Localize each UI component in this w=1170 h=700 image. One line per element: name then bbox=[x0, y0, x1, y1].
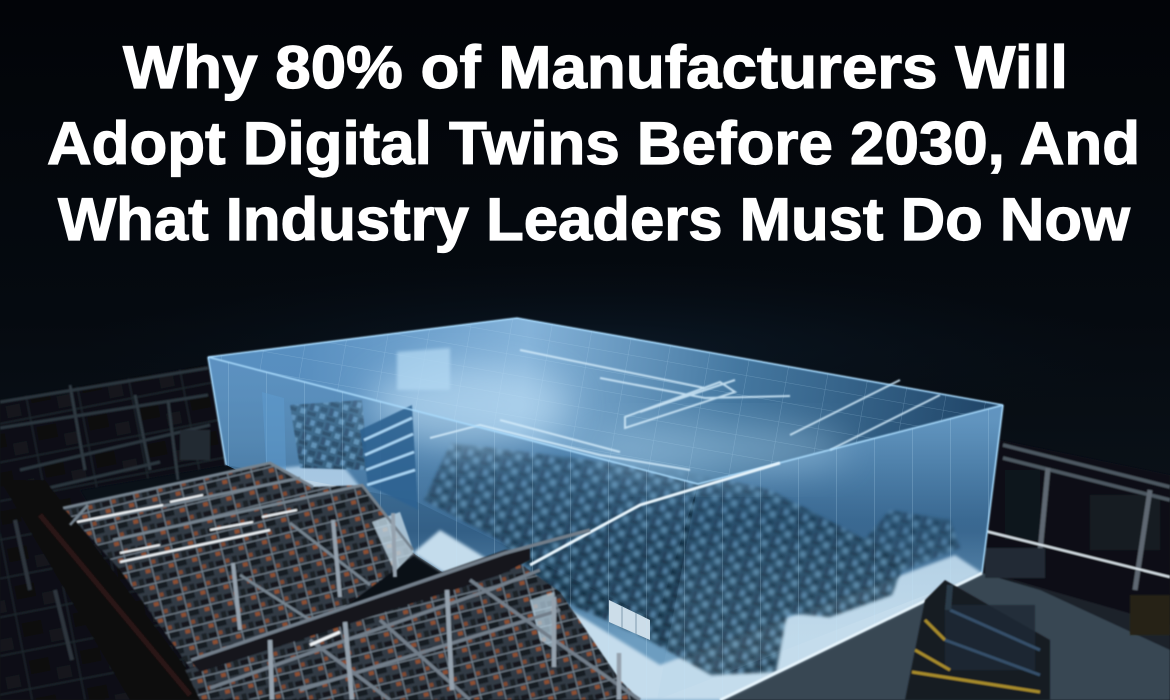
background factory hall, right bbox=[722, 440, 1170, 700]
forklift and racking, lower right bbox=[905, 580, 1170, 700]
machinery block: back left bbox=[290, 400, 368, 470]
second glow bbox=[590, 424, 850, 476]
bright crane light bbox=[530, 463, 780, 565]
wall lines bbox=[208, 357, 1003, 700]
cube floor, back left bbox=[262, 462, 395, 530]
title bbox=[47, 34, 1140, 253]
corner tower bbox=[397, 348, 450, 390]
roof grid bbox=[208, 318, 1003, 484]
control panels bbox=[360, 405, 418, 510]
title: Adopt Digital Twins Before 2030, And bbox=[47, 110, 1140, 177]
right wall veil bbox=[657, 405, 1003, 700]
roof bbox=[208, 318, 1003, 484]
white cabinets bbox=[609, 600, 650, 640]
cube floor, front bbox=[413, 530, 982, 700]
background factory hall, left bbox=[0, 365, 226, 700]
machinery block: far right bbox=[860, 510, 960, 572]
glowing digital twin cube bbox=[208, 318, 1003, 700]
small left panel bbox=[262, 392, 286, 470]
cube outline bbox=[208, 318, 1003, 573]
pipes on roof bbox=[430, 350, 940, 470]
left wall veil bbox=[208, 357, 698, 620]
foreground factory: lower frames bbox=[185, 530, 640, 700]
bright core glow bbox=[370, 365, 570, 445]
machinery block: center and right bbox=[424, 443, 905, 675]
foreground factory: upper frames bbox=[63, 463, 415, 668]
title: What Industry Leaders Must Do Now bbox=[58, 186, 1130, 253]
cube body bbox=[208, 318, 1003, 700]
glowing floor edge bbox=[720, 573, 982, 700]
title: Why 80% of Manufacturers Will bbox=[123, 34, 1068, 101]
